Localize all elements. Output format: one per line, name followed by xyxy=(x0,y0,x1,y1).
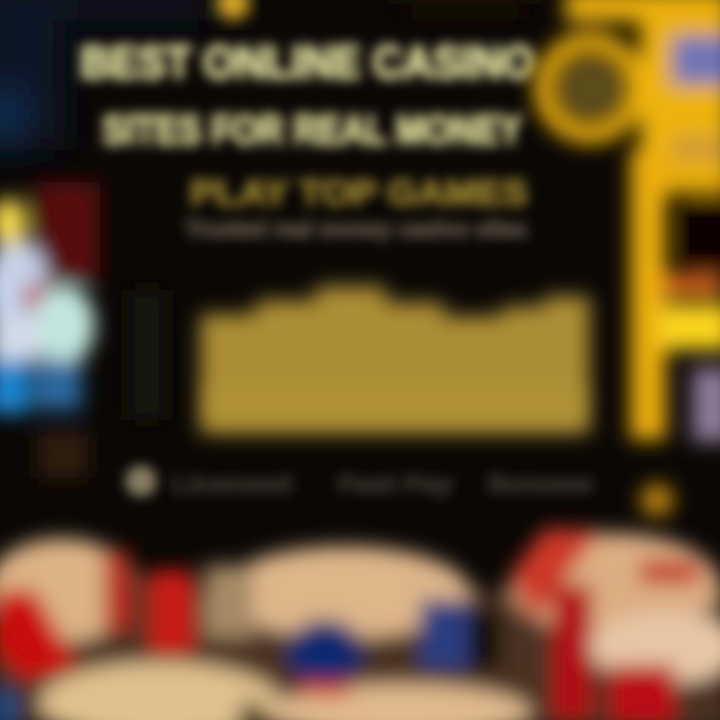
right frame upper xyxy=(662,168,720,194)
blue edge xyxy=(420,600,468,670)
icon: footer badge xyxy=(125,465,157,497)
side label xyxy=(128,290,166,420)
blue spot xyxy=(287,620,363,684)
background: navy upper left glow xyxy=(0,0,530,150)
footer text: Fast Pay xyxy=(338,471,454,498)
right chip red mid xyxy=(552,585,592,720)
left chip red xyxy=(0,590,78,680)
subheading: PLAY TOP GAMES xyxy=(190,172,528,213)
dark gap xyxy=(470,610,500,670)
green white arm xyxy=(33,285,95,365)
bottom left blue xyxy=(0,690,18,720)
right chip red far xyxy=(640,560,700,584)
footer text: Bonuses xyxy=(488,471,593,498)
chart: lighter band xyxy=(205,385,585,421)
panel: gold sign on right xyxy=(544,0,720,517)
ring inner xyxy=(560,58,620,118)
footer row xyxy=(125,465,593,498)
bottom cream chip xyxy=(40,662,280,720)
title xyxy=(80,36,535,153)
red accent xyxy=(23,282,49,314)
subheading xyxy=(185,172,528,243)
blue lower left xyxy=(0,360,28,414)
chips base xyxy=(0,590,720,720)
gold column xyxy=(630,150,666,440)
yellow hat xyxy=(0,198,27,246)
title: SITES FOR REAL MONEY xyxy=(102,106,522,153)
purple sign window xyxy=(672,36,720,84)
gold sign lower stripe xyxy=(672,136,720,160)
gold coin xyxy=(640,483,674,517)
left chip red edge xyxy=(104,550,130,630)
footer text: Licensed xyxy=(172,471,292,498)
icon: top yellow light xyxy=(216,0,250,20)
gold top bar xyxy=(565,0,720,22)
right chip xyxy=(510,533,720,637)
centre chip xyxy=(220,546,470,638)
yellow band xyxy=(660,304,720,350)
right chip red top xyxy=(510,528,600,620)
chart: gold block xyxy=(200,286,590,434)
panel: left character xyxy=(0,182,100,478)
subheading: Trusted real money casino sites xyxy=(185,216,527,243)
dark window xyxy=(684,202,720,266)
bottom red accent xyxy=(300,682,350,696)
dark red backdrop xyxy=(35,182,100,282)
left chip gap xyxy=(130,575,148,635)
orange band xyxy=(664,274,720,296)
blue lower right xyxy=(32,360,82,410)
lower window xyxy=(692,368,720,442)
footer text xyxy=(172,471,593,498)
gold sign body xyxy=(640,20,720,180)
bottom right dark xyxy=(238,702,266,720)
right lower red xyxy=(610,665,675,720)
white body xyxy=(0,238,48,342)
brown legs xyxy=(38,430,88,478)
white left body xyxy=(0,320,40,360)
centre left muted xyxy=(205,565,253,637)
second chip red xyxy=(150,570,194,654)
bottom centre chip xyxy=(270,684,530,720)
gold ring xyxy=(544,42,636,134)
title: BEST ONLINE CASINO xyxy=(80,36,535,88)
right lower chip xyxy=(590,612,720,684)
left chip stack xyxy=(0,538,138,642)
panel: poker chips at bottom xyxy=(0,528,720,720)
